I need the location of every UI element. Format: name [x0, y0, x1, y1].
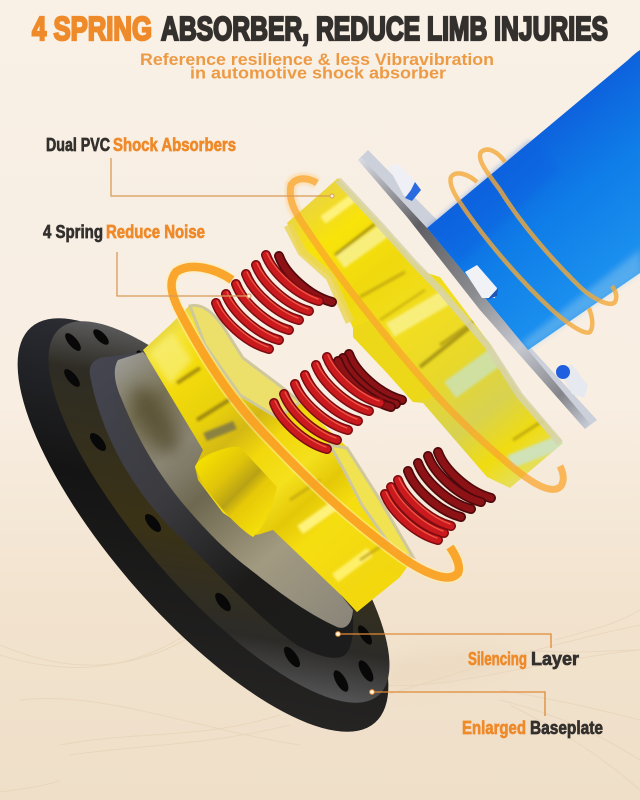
subtitle: Reference resilience & less Vibravibration	[140, 51, 494, 69]
upper yellow shock absorber	[287, 178, 565, 488]
boss of lower absorber	[195, 447, 277, 537]
boss of upper absorber	[353, 318, 432, 402]
soft glow behind upper ring	[290, 179, 317, 224]
plate side band	[358, 158, 590, 429]
icon: bolt top	[388, 164, 421, 201]
callout: enlarged baseplate: Enlarged	[462, 718, 526, 738]
stripes on lower absorber	[177, 368, 390, 578]
base plate	[0, 267, 444, 783]
callout: enlarged baseplate: Baseplate	[530, 718, 603, 738]
subtitle: in automotive shock absorber	[190, 64, 447, 82]
plate lobe, lower	[330, 445, 413, 557]
callout: 4 spring reduce noise: 4 Spring	[43, 222, 103, 242]
inner disc	[115, 352, 353, 628]
holes in base plate	[61, 327, 376, 694]
spring middle	[274, 354, 402, 449]
stripes on upper absorber	[323, 198, 565, 462]
spring back	[216, 253, 332, 349]
soft wave shading	[385, 648, 520, 690]
lower orange ring	[172, 267, 459, 577]
subtitle	[140, 51, 494, 82]
callout: 4 spring reduce noise	[43, 222, 251, 298]
orange ring on tube, inner	[450, 173, 592, 333]
lower yellow shock absorber	[143, 305, 413, 612]
blue cylinder tube	[427, 50, 640, 350]
block highlight	[150, 332, 192, 385]
plate lobe, upper	[190, 305, 300, 418]
callout: silencing layer: Layer	[531, 649, 579, 669]
bottom block	[343, 567, 400, 612]
silver mounting plate	[358, 150, 597, 429]
orange ring on tube, outer	[450, 150, 616, 333]
callout: silencing layer: Silencing	[468, 649, 527, 669]
callout: silencing layer	[336, 632, 579, 669]
upper orange ring	[290, 179, 563, 489]
callout: dual pvc shock absorbers	[46, 135, 334, 198]
spring lower	[385, 452, 491, 540]
background wave lines	[0, 610, 640, 792]
icon: bolt middle	[465, 265, 498, 300]
heading: 4 SPRING	[32, 10, 152, 47]
silencing layer	[90, 352, 353, 658]
callout: dual pvc shock absorbers: Shock Absorbers	[113, 135, 236, 155]
callout: enlarged baseplate	[370, 690, 603, 738]
callout: dual pvc shock absorbers: Dual PVC	[46, 135, 110, 155]
left rim of upper absorber	[288, 225, 350, 322]
callout: 4 spring reduce noise: Reduce Noise	[106, 222, 205, 242]
translucent rim of upper absorber	[338, 180, 560, 443]
icon: bolt bottom	[556, 364, 588, 398]
